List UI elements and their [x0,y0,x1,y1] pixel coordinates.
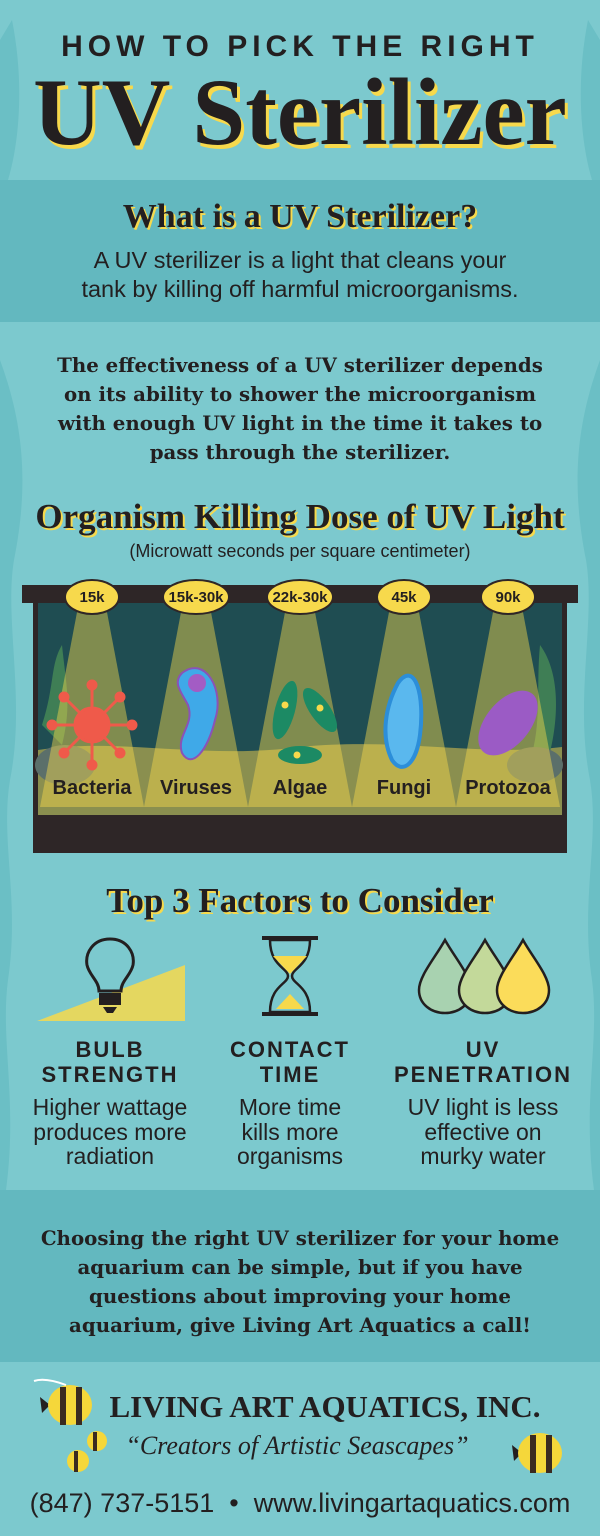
tagline: “Creators of Artistic Seascapes” [125,1431,469,1460]
text: effectiveness: pass through the sterilizer. [150,440,450,464]
lamps: 15k [79,589,105,606]
organism labels: Viruses [160,777,232,799]
text: definition: tank by killing off harmful microorganisms. [81,276,519,302]
factor: uv penetration: PENETRATION [394,1062,572,1087]
company name: LIVING ART AQUATICS, INC. [109,1389,540,1424]
icon: bulb [37,938,185,1021]
text: effectiveness: on its ability to shower the microorganism [64,382,536,406]
heading: dose: Organism Killing Dose of UV Light [35,497,565,536]
organism labels: Bacteria [53,777,132,799]
icon: hourglass [262,936,318,1016]
organism labels: Algae [273,777,327,799]
organism: protozoa [467,680,549,766]
title small: HOW TO PICK THE RIGHT [61,30,539,63]
text: definition [81,247,519,302]
heading: what is: What is a UV Sterilizer? [123,198,477,235]
text: effectiveness: with enough UV light in the time it takes to [58,411,542,435]
factor: bulb strength: BULB [75,1037,145,1062]
factor: uv penetration: UV light is less [408,1094,558,1120]
organism: algae [268,678,343,764]
light beams [40,607,560,807]
lamps: 15k-30k [168,589,224,606]
factor: contact time: More time [239,1094,341,1120]
factor: contact time [230,1037,350,1169]
text: definition: A UV sterilizer is a light that cleans your [94,247,506,273]
factor: uv penetration: murky water [420,1143,546,1169]
tank chart [22,579,578,853]
organism labels: Fungi [377,777,431,799]
heading: factors: Top 3 Factors to Consider [106,881,494,920]
factor: uv penetration [394,1037,572,1169]
text: closing: Choosing the right UV sterilizer for your home [41,1226,559,1250]
text: closing: questions about improving your home [89,1284,511,1308]
factor: contact time: organisms [237,1143,343,1169]
factor: contact time: CONTACT [230,1037,350,1062]
text: effectiveness: The effectiveness of a UV sterilizer depends [57,353,543,377]
text: closing: aquarium can be simple, but if you have [77,1255,523,1279]
lamps: 45k [391,589,417,606]
factor: bulb strength: produces more [33,1118,187,1144]
text: closing [41,1226,559,1337]
icons: fish [34,1378,562,1473]
organism: fungi [385,676,421,767]
band: what is [0,180,600,322]
factor: bulb strength: Higher wattage [33,1094,187,1120]
plants [42,645,556,760]
factor: bulb strength: STRENGTH [42,1062,178,1087]
factor: contact time: kills more [241,1118,339,1144]
factor: bulb strength [33,1037,187,1169]
icon: drops [418,938,550,1014]
factor: contact time: TIME [260,1062,320,1087]
factor: bulb strength: radiation [66,1143,154,1169]
organism labels [53,777,552,799]
tank frame [22,585,578,853]
lamps: 90k [495,589,521,606]
rocks [35,745,563,785]
contact: (847) 737-5151 • www.livingartaquatics.com [30,1488,570,1518]
organism: virus [178,668,218,759]
lamps [65,580,535,614]
band: closing [0,1190,600,1362]
text: effectiveness [57,353,543,464]
organism labels: Protozoa [465,777,552,799]
factor: uv penetration: effective on [424,1118,542,1144]
lamps: 22k-30k [272,589,328,606]
text: closing: aquarium, give Living Art Aquatics a call! [69,1313,531,1337]
title main: UV Sterilizer [33,59,567,165]
organism: bacteria [48,681,136,769]
subtitle: (Microwatt seconds per square centimeter) [129,541,471,561]
factor: uv penetration: UV [466,1037,500,1062]
